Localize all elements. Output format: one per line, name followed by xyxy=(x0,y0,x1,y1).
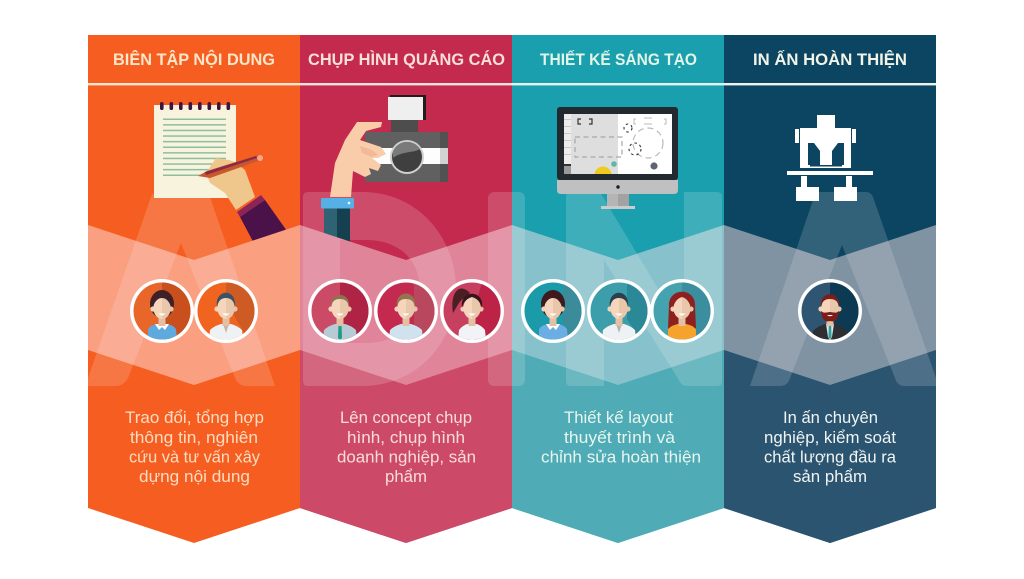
panel: thiết kế sáng tạo xyxy=(512,35,724,543)
text block: chụp hình quảng cáo: phẩm xyxy=(385,468,427,486)
text block: thiết kế sáng tạo: Thiết kế layout xyxy=(564,409,673,427)
illustration: printing machine icon xyxy=(787,115,873,201)
text block: in ấn hoàn thiện: In ấn chuyên xyxy=(783,409,878,427)
header: in ấn hoàn thiện: IN ẤN HOÀN THIỆN xyxy=(753,50,907,69)
text block: chụp hình quảng cáo xyxy=(337,409,476,486)
illustration: notepad and writing hand xyxy=(154,102,286,241)
text block: chụp hình quảng cáo: hình, chụp hình xyxy=(347,429,465,447)
watermark letters ADINA xyxy=(88,192,936,386)
zigzag band: chụp hình xyxy=(300,225,512,385)
avatar: man in white shirt, teal panel xyxy=(587,279,651,343)
panel: biên tập nội dung xyxy=(88,35,300,543)
avatar: woman with ponytail, crimson panel xyxy=(440,279,504,343)
text block: biên tập nội dung: dựng nội dung xyxy=(139,468,250,486)
zigzag band: biên tập xyxy=(88,225,300,385)
avatar: man in white shirt, orange panel xyxy=(194,279,258,343)
avatar: man in pale blue shirt, crimson panel xyxy=(374,279,438,343)
text block: thiết kế sáng tạo: chỉnh sửa hoàn thiện xyxy=(541,448,701,466)
zigzag band: thiết kế xyxy=(512,225,724,385)
text block: thiết kế sáng tạo xyxy=(541,409,701,466)
illustration: desktop monitor with layout xyxy=(557,107,678,209)
text block: biên tập nội dung: cứu và tư vấn xây xyxy=(129,448,261,466)
panel: chụp hình quảng cáo xyxy=(300,35,512,543)
text block: biên tập nội dung: Trao đổi, tổng hợp xyxy=(125,409,264,427)
text block: chụp hình quảng cáo: doanh nghiệp, sản xyxy=(337,448,476,466)
avatar: woman with long red hair, teal panel xyxy=(650,279,714,343)
avatar: bearded man in suit, navy panel xyxy=(798,279,862,343)
header: chụp hình quảng cáo: CHỤP HÌNH QUẢNG CÁO xyxy=(308,50,505,69)
text block: thiết kế sáng tạo: thuyết trình và xyxy=(564,429,676,447)
zigzag band: in ấn xyxy=(724,225,936,385)
avatar: woman in blue shirt, teal panel xyxy=(521,279,585,343)
text block: in ấn hoàn thiện: nghiệp, kiểm soát xyxy=(764,429,896,447)
text block: biên tập nội dung: thông tin, nghiên xyxy=(130,429,258,447)
illustration: hand holding camera xyxy=(321,95,448,242)
panel: in ấn hoàn thiện xyxy=(724,35,936,543)
text block: chụp hình quảng cáo: Lên concept chụp xyxy=(340,409,472,427)
text block: in ấn hoàn thiện xyxy=(764,409,897,486)
header: biên tập nội dung: BIÊN TẬP NỘI DUNG xyxy=(113,50,275,69)
text block: in ấn hoàn thiện: chất lượng đầu ra xyxy=(764,448,897,466)
avatar: woman in blue shirt, orange panel xyxy=(130,279,194,343)
avatar: man with green tie, crimson panel xyxy=(308,279,372,343)
text block: in ấn hoàn thiện: sản phẩm xyxy=(793,468,867,486)
text block: biên tập nội dung xyxy=(125,409,264,486)
header: thiết kế sáng tạo: THIẾT KẾ SÁNG TẠO xyxy=(540,50,697,69)
